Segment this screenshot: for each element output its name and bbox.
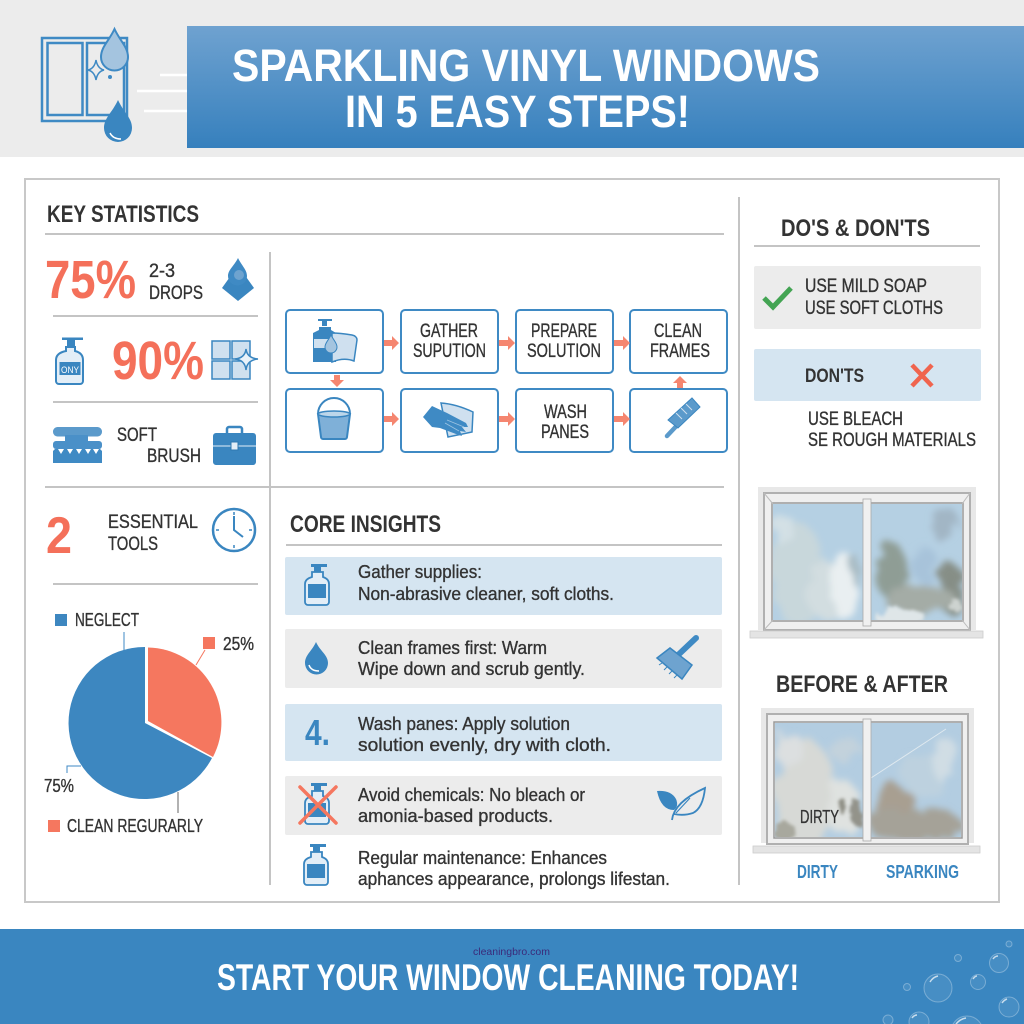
step box: wash panes <box>516 389 613 452</box>
insight 5: aphances appearance, prolongs lifestan. <box>358 868 670 889</box>
insight 1 <box>285 557 722 615</box>
step box: prepare: SOLUTION <box>527 341 601 362</box>
stat: 2 essential tools: TOOLS <box>108 534 158 555</box>
insight 3 <box>285 704 722 761</box>
stat: 75 percent <box>45 250 203 310</box>
icon: scrub brush <box>53 427 102 463</box>
legend: neglect <box>55 610 139 630</box>
don'ts card <box>754 349 981 401</box>
stat: 2 essential tools: 2 <box>46 507 72 565</box>
icon: drop on diamond <box>222 258 254 301</box>
legend: neglect: NEGLECT <box>75 610 139 630</box>
label: sparkling: SPARKING <box>886 862 959 882</box>
label: soft brush: BRUSH <box>147 446 201 467</box>
step box: prepare: PREPARE <box>531 321 597 342</box>
label: dirty: DIRTY <box>797 862 838 882</box>
insight 1: Gather supplies: <box>358 561 482 582</box>
main panel frame <box>25 179 999 902</box>
stat: 75 percent: 75% <box>45 250 136 310</box>
window photo: top <box>750 487 983 638</box>
step box: clean frames <box>630 310 727 373</box>
insight 4: Avoid chemicals: No bleach or <box>358 784 585 805</box>
insight 4 <box>285 776 722 835</box>
step box: brush <box>630 389 727 452</box>
window photo: bottom: DIRTY <box>800 807 839 827</box>
title banner <box>187 26 1024 148</box>
icon: window with water drops <box>42 29 132 142</box>
insight 2: Wipe down and scrub gently. <box>358 658 585 679</box>
stat: 2 essential tools <box>46 507 198 565</box>
step box: gather: SUPUTION <box>413 341 486 362</box>
don'ts list: SE ROUGH MATERIALS <box>808 430 976 451</box>
step box: gather <box>401 310 498 373</box>
pie chart <box>44 610 254 836</box>
call to action: START YOUR WINDOW CLEANING TODAY! <box>217 957 799 998</box>
step box: clean frames: FRAMES <box>650 341 710 362</box>
legend: 25 percent <box>203 634 254 654</box>
step box: gather: GATHER <box>420 321 478 342</box>
header band <box>0 0 1024 157</box>
flow arrows <box>330 336 687 426</box>
step box: wash panes: PANES <box>541 422 589 443</box>
stat: 90 percent: 90% <box>112 331 204 391</box>
process flow <box>286 310 727 452</box>
legend: clean regularly <box>48 816 203 836</box>
icon: sparkling window <box>212 341 258 379</box>
icon: soap bottle <box>56 338 83 384</box>
step box: supplies icon <box>286 310 383 373</box>
insight 5 <box>304 844 670 889</box>
source credit: cleaningbro.com <box>473 947 550 958</box>
panel dividers <box>45 197 980 885</box>
title banner: SPARKLING VINYL WINDOWS <box>232 40 820 91</box>
icon: toolbox <box>213 427 256 465</box>
title banner: IN 5 EASY STEPS! <box>345 86 690 137</box>
legend: 25 percent: 25% <box>223 634 254 654</box>
do's card: USE SOFT CLOTHS <box>805 298 943 319</box>
insight 1: Non-abrasive cleaner, soft cloths. <box>358 583 614 604</box>
do's card <box>754 266 981 329</box>
icon: clock <box>213 509 255 551</box>
stat: 75 percent: 2-3 <box>149 261 175 282</box>
insight 3: solution evenly, dry with cloth. <box>358 734 611 755</box>
heading: before and after: BEFORE & AFTER <box>776 671 948 698</box>
speed lines <box>137 75 187 111</box>
insight 2: Clean frames first: Warm <box>358 637 547 658</box>
step box: clean frames: CLEAN <box>654 321 702 342</box>
step box: prepare <box>516 310 613 373</box>
stat: 75 percent: DROPS <box>149 283 203 304</box>
heading: do's and don'ts: DO'S & DON'TS <box>781 215 930 242</box>
insight 4: amonia-based products. <box>358 805 553 826</box>
footer band <box>0 929 1024 1024</box>
step box: glove and cloth <box>401 389 498 452</box>
don'ts card: DON'TS <box>805 366 864 387</box>
step box: wash panes: WASH <box>544 402 587 423</box>
insight 5: Regular maintenance: Enhances <box>358 847 607 868</box>
insight 3: 4. <box>305 712 330 753</box>
don'ts list <box>808 409 976 451</box>
legend: clean regularly: CLEAN REGURARLY <box>67 816 203 836</box>
decoration: bubbles <box>883 941 1019 1024</box>
label: soft brush <box>117 425 201 467</box>
window photo: bottom <box>753 708 980 853</box>
icon: soap bottle: ONY <box>61 365 79 375</box>
insight 3: Wash panes: Apply solution <box>358 713 570 734</box>
label: soft brush: SOFT <box>117 425 157 446</box>
insight 2 <box>285 629 722 688</box>
do's card: USE MILD SOAP <box>805 276 927 297</box>
step box: bucket <box>286 389 383 452</box>
heading: core insights: CORE INSIGHTS <box>290 511 441 538</box>
stat: 2 essential tools: ESSENTIAL <box>108 512 198 533</box>
label: 75 percent: 75% <box>44 776 74 796</box>
heading: key statistics: KEY STATISTICS <box>47 201 199 228</box>
don'ts list: USE BLEACH <box>808 409 903 430</box>
